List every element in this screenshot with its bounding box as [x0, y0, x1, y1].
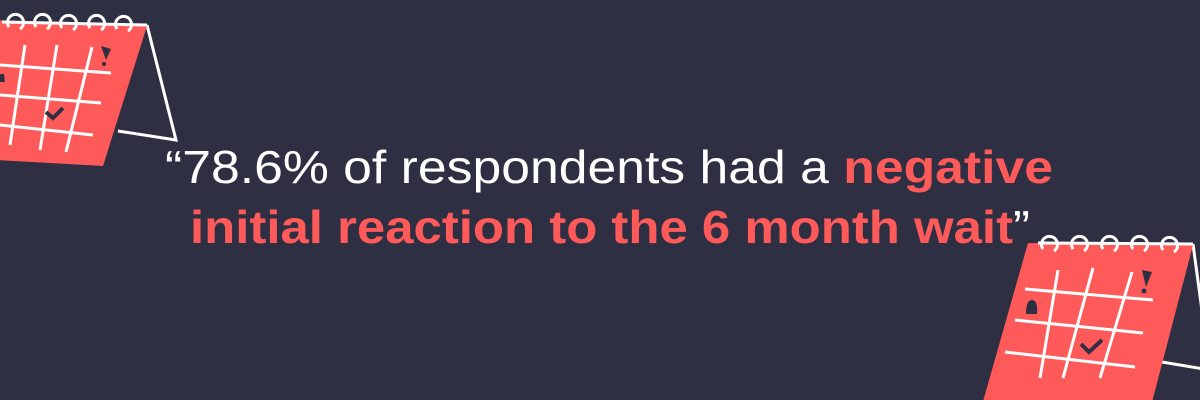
quote line 1: “78.6% of respondents had a negative	[165, 141, 1053, 193]
quote line 2: initial reaction to the 6 month wait ”	[190, 201, 1030, 253]
icon: calendar bottom-right	[982, 236, 1200, 400]
icon: calendar top-left	[0, 14, 176, 166]
